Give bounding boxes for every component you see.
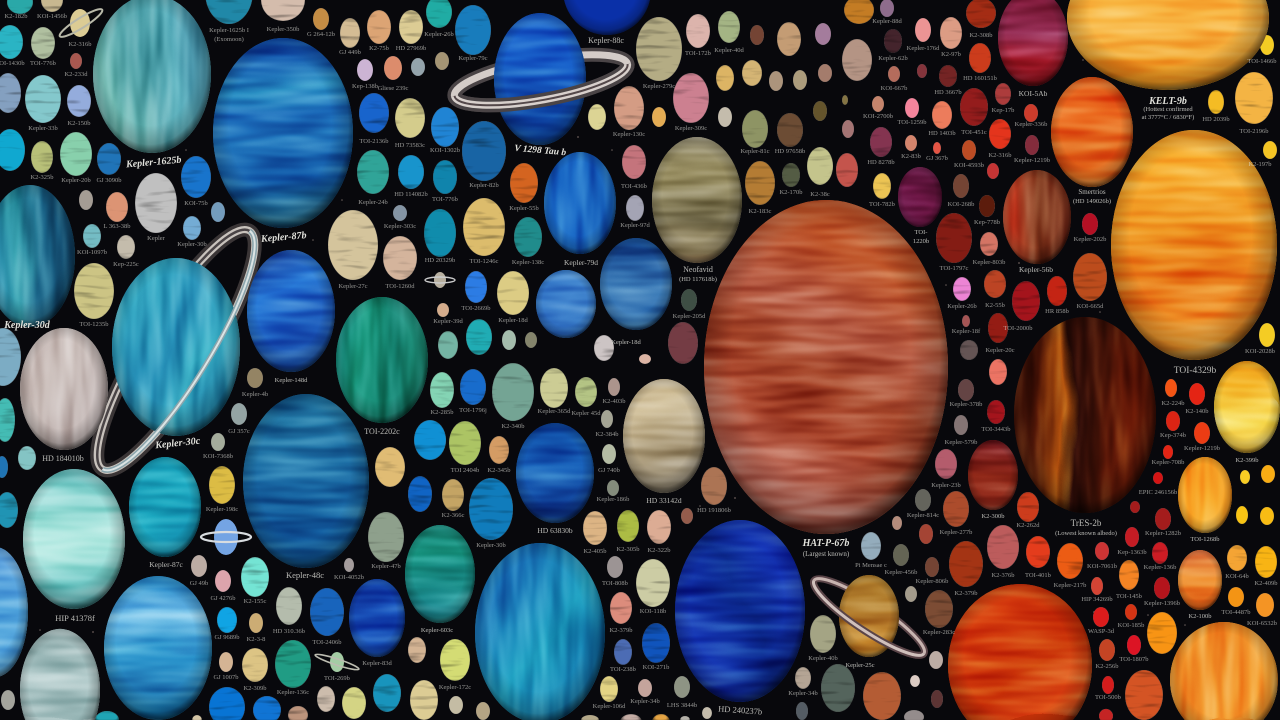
small planet name labels: Kepler-176d — [907, 45, 940, 52]
small planet name labels: Kepler-130c — [613, 131, 645, 138]
small planet name labels: GJ 3090b — [96, 177, 122, 184]
planet: Smertrios: Smertrios — [1078, 188, 1106, 196]
planet: Kepler-25c with ring — [810, 575, 928, 668]
planet: KOI-5Ab — [998, 0, 1068, 96]
small planet name labels: TOI-401b — [1025, 572, 1051, 579]
small planet name labels: Kepler-97d — [620, 222, 650, 229]
planet: TOI-1220b: 1220b — [913, 238, 929, 245]
small planet name labels: Kepler-40b — [808, 655, 838, 662]
planet: left edge blue world — [0, 548, 28, 676]
small planet name labels: K2-409b — [1254, 580, 1278, 587]
planet: Kepler-87c — [129, 457, 201, 568]
small planet name labels: Kepler-30b — [177, 241, 207, 248]
small planet name labels: Kepler-24b — [358, 199, 388, 206]
small planet name labels: Kepler-39d — [433, 318, 463, 325]
small planet name labels: K2-38c — [810, 191, 830, 198]
small planet name labels: GJ 9689b — [214, 634, 240, 641]
small planet name labels: K2-405b — [583, 548, 607, 555]
planet: Kepler-18d — [536, 270, 641, 346]
small planet name labels: GJ 357c — [228, 428, 250, 435]
small planet name labels: K2-97b — [941, 51, 961, 58]
small planet name labels: K2-379b — [954, 590, 978, 597]
small planet name labels: Kepler 45d — [571, 410, 601, 417]
small planet name labels: KOI-64b — [1225, 573, 1249, 580]
planet: TOI-2202c — [336, 297, 428, 434]
small planet name labels: TOI 2404b — [451, 467, 479, 474]
small planet name labels: TOI-500b — [1095, 694, 1121, 701]
planet: Neofavid — [652, 137, 742, 282]
small planet name labels: Kepler-82b — [469, 182, 499, 189]
small planet name labels: KOI-2028b — [1245, 348, 1275, 355]
small planet name labels: Kepler-1219b — [1014, 157, 1050, 164]
small planet name labels: K2-316b — [68, 41, 92, 48]
planet: V 1298 Tau b with ring — [447, 13, 635, 156]
small planet name labels: Kep-374b — [1160, 432, 1186, 439]
small planet name labels: K2-170b — [779, 189, 803, 196]
small planet name labels: Kep-225c — [113, 261, 139, 268]
small planet name labels: K2-285b — [430, 409, 454, 416]
planet: Kepler-30d — [0, 185, 75, 330]
planet: KELT-9b: at 3777°C / 6830°F) — [1142, 114, 1194, 121]
small planet name labels: KOI-271b — [643, 664, 669, 671]
planet: TrES-2b — [1014, 317, 1156, 536]
small planet name labels: TOI-451c — [961, 129, 987, 136]
small planet name labels: K2-262d — [1016, 522, 1040, 529]
planet: Kepler-30c with ring: Kepler-30c — [154, 436, 201, 451]
planet: TOI-1268b: TOI-1268b — [1190, 536, 1220, 543]
planet: bottom right orange world — [1170, 622, 1278, 720]
small planet name labels: K2-75b — [369, 45, 389, 52]
planet: Kepler-30d: Kepler-30d — [3, 320, 51, 331]
small planet name labels: KOI-667b — [881, 85, 907, 92]
small planet name labels: K2-322b — [647, 547, 671, 554]
small planet name labels: TOI-1259b — [897, 119, 927, 126]
small planet name labels: Pi Mensae c — [855, 562, 887, 569]
planet: Kepler-603c — [405, 525, 475, 634]
planet: Kepler-88c: Kepler-88c — [588, 36, 624, 45]
planet: Smertrios: (HD 149026b) — [1073, 198, 1111, 205]
small planet name labels: Kepler-336b — [1015, 121, 1047, 128]
planet: HIP 41378f: HIP 41378f — [55, 613, 95, 623]
small planet name labels: TOI-808b — [602, 580, 628, 587]
small planet name labels: TOI-2136b — [359, 138, 389, 145]
small planet name labels: Kepler-30b — [476, 542, 506, 549]
planet: large turquoise-blue world — [475, 543, 605, 720]
small planet name labels: K2-376b — [991, 572, 1015, 579]
planet: HAT-P-67b: HAT-P-67b — [802, 538, 849, 549]
small planet name labels: K2-55b — [985, 302, 1005, 309]
small planet name labels: TOI-172b — [685, 50, 711, 57]
small planet name labels: Kep-17b — [992, 107, 1014, 114]
small planet name labels: KOI-75b — [184, 200, 208, 207]
small planet name labels: Kepler-55b — [509, 205, 539, 212]
small planet name labels: GJ 49b — [190, 580, 208, 587]
small planet name labels: K2-308b — [969, 32, 993, 39]
small planet name labels: Kepler-138c — [512, 259, 544, 266]
planet: Kepler-87c: Kepler-87c — [149, 560, 183, 569]
small planet name labels: Kep-778b — [974, 219, 1000, 226]
planet: Kepler-56b: Kepler-56b — [1019, 265, 1053, 274]
small planet name labels: Kepler-708b — [1152, 459, 1184, 466]
small planet name labels: Kepler-20c — [985, 347, 1015, 354]
small planet name labels: Kepler-198c — [206, 506, 238, 513]
small planet name labels: GJ 1007b — [213, 674, 239, 681]
small planet name labels: WASP-3d — [1088, 628, 1115, 635]
small planet name labels: GJ 449b — [339, 49, 361, 56]
small planet name labels: Kepler-40d — [714, 47, 744, 54]
small planet name labels: Kepler-277b — [940, 529, 972, 536]
small planet name labels: TOI-1235b — [79, 321, 109, 328]
small planet name labels: TOI-1796j — [459, 407, 487, 414]
small planet name labels: HR 858b — [1045, 308, 1069, 315]
planet: Kepler-48c: Kepler-48c — [286, 570, 324, 580]
planet: TOI-1220b — [898, 167, 942, 243]
small planet name labels: GJ 367b — [926, 155, 948, 162]
small planet name labels: K2-403b — [602, 398, 626, 405]
small planet name labels: K2-366c — [442, 512, 464, 519]
small planet name labels: KOI-6532b — [1247, 620, 1277, 627]
small planet name labels: TOI-782b — [869, 201, 895, 208]
planet: Kepler-1625b — [93, 0, 211, 169]
planet: Kepler-30c with ring — [90, 222, 262, 478]
planet: Kepler-48c — [243, 394, 369, 580]
small planet name labels: HD 73583c — [395, 142, 425, 149]
small planet name labels: Kepler-172c — [439, 684, 471, 691]
planet: HAT-P-67b — [704, 200, 948, 558]
small planet name labels: K2-3-8 — [247, 636, 265, 643]
small planet name labels: TOI-776b — [30, 60, 56, 67]
small planet name labels: K2-305b — [616, 546, 640, 553]
planet: Smertrios — [1051, 77, 1133, 204]
planet: Kepler-148d — [247, 250, 335, 384]
small planet name labels: K2-155c — [244, 598, 266, 605]
small planet name labels: K2-340b — [501, 423, 525, 430]
planet: bright blue banded world — [104, 576, 212, 720]
small planet name labels: TOI-1260d — [385, 283, 415, 290]
planet: Kepler-79d — [544, 152, 616, 266]
small planet name labels: HD 8278b — [867, 159, 895, 166]
planet: TrES-2b: (Lowest known albedo) — [1055, 530, 1117, 537]
small planet name labels: Kepler-20b — [61, 177, 91, 184]
planet: K2-300b — [968, 440, 1018, 518]
small planet name labels: EPIC 246156b — [1139, 489, 1177, 496]
small planet name labels: Kepler-33b — [28, 125, 58, 132]
planet: TrES-2b: TrES-2b — [1071, 518, 1102, 528]
small planet name labels: Kepler-34b — [630, 698, 660, 705]
small planet name labels: Kepler-803b — [973, 259, 1005, 266]
small planet name labels: K2-384b — [595, 431, 619, 438]
small planet name labels: HIP 34269b — [1081, 596, 1113, 603]
small planet name labels: KOI-4593b — [954, 162, 984, 169]
small planet name labels: K2-83b — [901, 153, 921, 160]
small planet name labels: Kepler-1396b — [1144, 600, 1180, 607]
small planet name labels: TOI-269b — [324, 675, 350, 682]
planet: K2-100b: K2-100b — [1188, 613, 1212, 620]
planet: K2-100b — [1178, 550, 1222, 618]
small planet name labels: K2-150b — [67, 120, 91, 127]
small planet name labels: TOI-1466b — [1247, 58, 1277, 65]
planet: TOI-2202c: TOI-2202c — [364, 427, 400, 436]
planet: KELT-9b — [1067, 0, 1269, 120]
small planet name labels: KOI-665d — [1077, 303, 1104, 310]
planet: Neofavid: Neofavid — [683, 265, 713, 274]
small planet name labels: HD 1403b — [928, 130, 956, 137]
planet: Kepler-87b — [213, 38, 353, 244]
small planet name labels: K2-197b — [1248, 161, 1272, 168]
small planet name labels: Kepler-1625b I — [209, 27, 249, 34]
planet: TOI-1220b: TOI- — [915, 229, 927, 236]
planet: Kepler-79d: Kepler-79d — [564, 258, 598, 267]
small planet name labels: Kepler-27c — [338, 283, 368, 290]
small planet name labels: K2-345b — [487, 467, 511, 474]
small planet name labels: TOI-1797c — [940, 265, 968, 272]
small planet name labels: KOI-2700b — [863, 113, 893, 120]
small planet name labels: K2-325b — [30, 174, 54, 181]
small planet name labels: Kepler-62b — [878, 55, 908, 62]
small planet name labels: Kepler-47b — [371, 563, 401, 570]
planet: Kepler-25c with ring: Kepler-25c — [845, 662, 875, 669]
planet: Kepler-88c — [563, 0, 651, 45]
small planet name labels: TOI-238b — [610, 666, 636, 673]
small planet name labels: Kepler-186b — [597, 496, 629, 503]
small planet name labels: HD 20329b — [425, 257, 455, 264]
small planet name labels: Kepler-378b — [950, 401, 982, 408]
small planet name labels: (Exomoon) — [214, 36, 244, 43]
planet: large orange banded world: TOI-4329b — [1174, 366, 1217, 376]
small planet name labels: KOI-7368b — [203, 453, 233, 460]
small planet name labels: K2-309b — [243, 685, 267, 692]
small planet name labels: HD 310.36b — [273, 628, 305, 635]
small planet name labels: Kepler-81c — [740, 148, 770, 155]
small planet name labels: TOI-2196b — [1239, 128, 1269, 135]
small planet name labels: TOI-436b — [621, 183, 647, 190]
small planet name labels: K2-183c — [749, 208, 771, 215]
small planet name labels: Kepler-365d — [538, 408, 571, 415]
small planet name labels: GJ 4276b — [210, 595, 236, 602]
small planet name labels: Kepler-309c — [675, 125, 707, 132]
small planet name labels: Kepler-18d — [498, 317, 528, 324]
planet: HD 184010b — [20, 328, 108, 461]
planet: Kepler-87b: Kepler-87b — [260, 230, 307, 245]
small planet name labels: Kepler-1282b — [1145, 530, 1181, 537]
small planet name labels: K2-256b — [1095, 663, 1119, 670]
small planet name labels: HD 3667b — [934, 89, 962, 96]
small planet name labels: Kepler-23b — [931, 482, 961, 489]
planet: HD 33142d — [623, 379, 705, 503]
planet: HIP 41378f — [23, 469, 125, 621]
small planet name labels: Kepler-34b — [788, 690, 818, 697]
small planet name labels: K2-379b — [609, 627, 633, 634]
small planet name labels: HD 191806b — [697, 507, 731, 514]
small planet name labels: Kepler-814c — [907, 512, 939, 519]
small planet name labels: KOI-1456b — [37, 13, 67, 20]
small planet name labels: TOI-2406b — [312, 639, 342, 646]
small planet name labels: KOI-4052b — [334, 574, 364, 581]
small planet name labels: Kepler-1219b — [1184, 445, 1220, 452]
small planet name labels: TOI-776b — [432, 196, 458, 203]
planet: Kepler-603c: Kepler-603c — [421, 627, 453, 634]
small planet name labels: Kepler-106d — [593, 703, 626, 710]
planet: K2-300b: K2-300b — [981, 513, 1005, 520]
planet: K2-399b: K2-399b — [1235, 457, 1259, 464]
small planet name labels: Kepler-806b — [916, 578, 948, 585]
small planet name labels: Kepler-579b — [945, 439, 977, 446]
small planet name labels: Kepler-88d — [872, 18, 902, 25]
small planet name labels: Kepler-136c — [277, 689, 309, 696]
small planet name labels: TOI-145b — [1116, 593, 1142, 600]
small planet name labels: Kepler-303c — [384, 223, 416, 230]
small planet name labels: K2-316b — [988, 152, 1012, 159]
small planet name labels: Kepler-4b — [242, 391, 268, 398]
small planet name labels: LHS 3844b — [667, 702, 697, 709]
small planet name labels: KOI-1302b — [430, 147, 460, 154]
planet: KELT-9b: (Hottest confirmed — [1143, 106, 1193, 113]
small planet name labels: HD 160151b — [963, 75, 997, 82]
planet: V 1298 Tau b with ring: V 1298 Tau b — [514, 144, 567, 158]
small planet name labels: Kep-1363b — [1117, 549, 1147, 556]
small planet name labels: K2-224b — [1161, 400, 1185, 407]
planet: KOI-5Ab: KOI-5Ab — [1019, 89, 1048, 98]
small planet name labels: KOI-118b — [640, 608, 666, 615]
small planet name labels: KOI-1097b — [77, 249, 107, 256]
small planet name labels: KOI-268b — [948, 201, 974, 208]
small planet name labels: Kepler-136b — [1144, 564, 1176, 571]
planet: HD 33142d: HD 33142d — [646, 496, 682, 505]
small planet name labels: TOI-4487b — [1221, 609, 1251, 616]
planet: Neofavid: (HD 117618b) — [679, 276, 717, 283]
small planet name labels: TOI-2669b — [461, 305, 491, 312]
small planet name labels: Kepler-83d — [362, 660, 392, 667]
small planet name labels: TOI-1246c — [470, 258, 498, 265]
planet: Kepler banded blue — [600, 238, 672, 330]
small planet name labels: Kepler-202b — [1074, 236, 1106, 243]
small planet name labels: Kepler-217b — [1054, 582, 1086, 589]
small planet name labels: K2-182b — [4, 13, 28, 20]
planet: HD 240237b — [675, 520, 805, 714]
small planet name labels: L 363-38b — [103, 223, 131, 230]
planet: HAT-P-67b: (Largest known) — [803, 550, 850, 558]
planet: K2-399b — [1214, 361, 1280, 462]
planet: Kepler-18d: Kepler-18d — [611, 339, 641, 346]
small planet name labels: Kepler-205d — [673, 313, 706, 320]
planet: deep blue world — [349, 579, 405, 657]
planet: large orange banded world — [1111, 130, 1277, 373]
small planet name labels: HD 2039b — [1202, 116, 1230, 123]
small planet name labels: Kepler-18f — [952, 328, 981, 335]
planet: Kepler-148d: Kepler-148d — [275, 377, 308, 384]
planet: Kepler-1625b: Kepler-1625b — [125, 155, 182, 170]
small ringed planets — [57, 6, 455, 672]
small planet name labels: KOI-185b — [1118, 622, 1144, 629]
planet: Kepler-56b — [1003, 170, 1071, 274]
small planet name labels: G 264-12b — [307, 31, 335, 38]
small planet name labels: HD 27969b — [396, 45, 426, 52]
small planet name labels: HD 97658b — [775, 148, 805, 155]
small planet name labels: K2-233d — [64, 71, 88, 78]
small planet name labels: TOI-3443b — [981, 426, 1011, 433]
small planet name labels: TOI-2000b — [1003, 325, 1033, 332]
small planet name labels: Kepler-456b — [885, 569, 917, 576]
planet: HD 184010b: HD 184010b — [42, 454, 84, 463]
planet: KELT-9b: KELT-9b — [1148, 96, 1187, 107]
small planet name labels: HD 114082b — [394, 191, 428, 198]
small planet name labels: Kepler-79c — [458, 55, 488, 62]
small planet name labels: GJ 740b — [598, 467, 620, 474]
planet: TOI-1268b — [1178, 457, 1232, 541]
small planet name labels: TOI-1807b — [1119, 656, 1149, 663]
small planet name labels: Kepler-350b — [267, 26, 299, 33]
small planet name labels: Kepler-283c — [923, 629, 955, 636]
planet: HD 63830b — [516, 423, 594, 533]
small planet name labels: Kep-138b — [352, 83, 378, 90]
small planet name labels: Kepler-26b — [947, 303, 977, 310]
planet: HD 63830b: HD 63830b — [537, 526, 573, 535]
planet: pale grey-teal world — [20, 628, 100, 720]
planet: HD 240237b: HD 240237b — [718, 703, 763, 717]
small planet name labels: Kepler — [147, 235, 166, 242]
small planet name labels: KOI-7061b — [1087, 563, 1117, 570]
planet: large red world — [948, 584, 1092, 720]
small planet name labels: Kepler-26b — [424, 31, 454, 38]
small planet name labels: Gliese 239c — [378, 85, 409, 92]
small planet name labels: Kepler-279c — [643, 83, 675, 90]
small planet name labels: K2-140b — [1185, 408, 1209, 415]
